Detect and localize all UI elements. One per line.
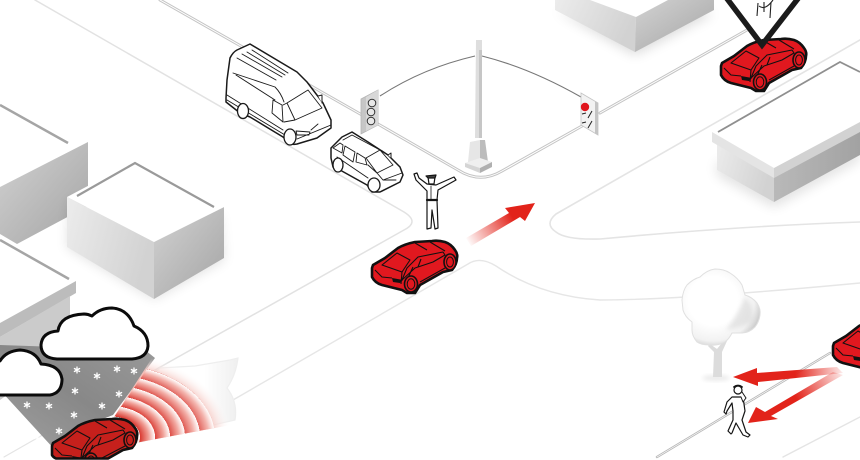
building: centre left bbox=[67, 161, 224, 299]
police officer directing traffic bbox=[414, 173, 456, 229]
car: red at top right bbox=[721, 39, 806, 91]
pedestrian on phone bbox=[724, 386, 750, 437]
traffic light: right with red lamp bbox=[581, 93, 598, 135]
building: top centre bbox=[555, 0, 714, 55]
snow region with flakes bbox=[0, 345, 155, 450]
snowflakes bbox=[19, 366, 137, 440]
car: red at intersection bbox=[372, 241, 457, 293]
arrow: to tree bbox=[733, 367, 843, 386]
car: red at right edge bbox=[833, 319, 860, 371]
building: right bbox=[712, 61, 860, 207]
car: red in snow bbox=[52, 419, 137, 458]
arrow: to pedestrian bbox=[748, 372, 843, 423]
tree bbox=[682, 269, 760, 381]
icon: warning triangle with pedestrian bbox=[725, 0, 800, 45]
building: lower left bbox=[0, 240, 76, 400]
radar: red sensor waves bbox=[112, 358, 231, 443]
van bbox=[226, 44, 331, 145]
arrow: main direction bbox=[466, 203, 535, 246]
silver car bbox=[331, 132, 403, 192]
cloud: small bbox=[0, 350, 62, 395]
building: upper left bbox=[0, 105, 88, 244]
traffic light: left bbox=[361, 90, 378, 134]
cloud: large bbox=[41, 308, 148, 359]
radar: white sensor cone bbox=[125, 358, 238, 443]
traffic signal: pole with base bbox=[380, 40, 581, 173]
